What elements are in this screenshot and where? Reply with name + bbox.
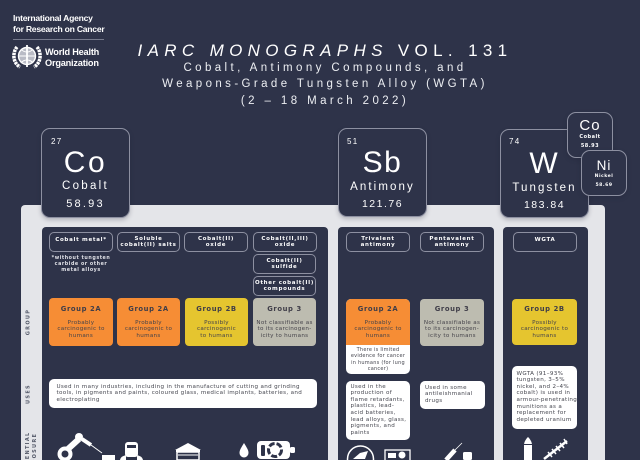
- label: WGTA: WGTA: [535, 237, 555, 243]
- group card: oxide 2B: carcinogenic: [197, 326, 236, 332]
- uses: WGTA: nickel, and 2–4%: [516, 384, 569, 390]
- element card: small cobalt: [567, 112, 613, 158]
- group card: other cobalt 3: icity to humans: [261, 333, 308, 339]
- element card: cobalt: Co: [64, 146, 107, 179]
- label: cobalt sulfide: sulfide: [272, 264, 297, 270]
- limited evidence note: in humans (for lung: [351, 360, 405, 366]
- icon: welder: [120, 442, 143, 460]
- label: trivalent antimony: [346, 232, 410, 252]
- logo: IARC and WHO: [12, 13, 105, 68]
- group card: cobalt metal 2A: humans: [69, 333, 93, 339]
- icon: drop and battery recycling: [240, 441, 295, 459]
- element card: small cobalt: 58.93: [581, 143, 599, 149]
- uses: trivalent antimony: acid batteries,: [350, 410, 396, 416]
- group card: oxide 2B: Group 2B: [196, 305, 237, 313]
- uses: trivalent antimony: production of: [350, 390, 392, 396]
- label: cobalt sulfide: Cobalt(II): [266, 258, 303, 264]
- uses: pentavalent antimony: Used in some: [425, 384, 467, 390]
- group heading: carcinogenic to: [354, 326, 402, 332]
- element card: tungsten: Tungsten: [512, 182, 577, 194]
- element card: tungsten: W: [529, 147, 558, 180]
- label: cobalt metal: [49, 232, 113, 252]
- group card: soluble salts 2A: Group 2A: [128, 305, 169, 313]
- panel: tungsten: [503, 227, 588, 460]
- group heading: [346, 299, 410, 345]
- uses: cobalt: [49, 379, 317, 408]
- group card: pentavalent antimony 3: icity to humans: [428, 333, 476, 339]
- label: cobalt metal: Cobalt metal*: [55, 237, 107, 243]
- group card: soluble salts 2A: Probably: [135, 320, 162, 326]
- icon: chain of bullets: [543, 438, 568, 460]
- panel: cobalt: [42, 227, 328, 460]
- row label: uses: USES: [25, 384, 31, 404]
- group card: other cobalt 3: [253, 298, 316, 346]
- group card: WGTA 2B: carcinogenic to: [521, 326, 568, 332]
- element card: small nickel: Nickel: [595, 174, 613, 179]
- label: cobalt oxide: oxide: [206, 242, 226, 248]
- uses: trivalent antimony: plastics, lead-: [350, 403, 394, 409]
- element card: small nickel: 58.69: [595, 183, 613, 188]
- uses: WGTA: [512, 366, 577, 429]
- limited evidence note: cancer): [368, 366, 388, 372]
- label: trivalent antimony: antimony: [361, 242, 395, 248]
- limited evidence note: There is limited: [357, 347, 399, 353]
- label: soluble salts: cobalt(II) salts: [120, 242, 177, 248]
- label: other cobalt compounds: Other cobalt(II): [255, 280, 314, 286]
- panel: antimony: [338, 227, 494, 460]
- footnote: cobalt metal: *without tungsten: [52, 256, 110, 261]
- subtitle: Weapons-Grade Tungsten Alloy (WGTA): [162, 78, 488, 90]
- limited evidence note: evidence for cancer: [351, 353, 405, 359]
- row label: potential exposure: [25, 432, 38, 460]
- uses: cobalt: Used in many industries, including in the manufacture of cutting and grinding: [56, 384, 300, 390]
- group card: pentavalent antimony 3: [420, 299, 484, 346]
- label: other cobalt compounds: compounds: [264, 286, 305, 292]
- uses: trivalent antimony: pigments, and: [350, 423, 395, 429]
- group card: trivalent antimony 2A with note: [346, 299, 410, 374]
- subtitle: [162, 62, 488, 106]
- footnote: cobalt metal: carbide or other: [55, 262, 107, 267]
- label: pentavalent antimony: Pentavalent: [429, 236, 475, 242]
- uses: trivalent antimony: paints: [350, 430, 370, 436]
- element card: cobalt: 27: [51, 137, 62, 146]
- element card: small cobalt: Cobalt: [579, 134, 601, 140]
- element card: cobalt: 58.93: [66, 198, 105, 210]
- uses: cobalt: electroplating: [56, 397, 100, 403]
- label: WGTA: [513, 232, 577, 252]
- IARC name: [13, 13, 105, 34]
- subtitle: Cobalt, Antimony Compounds, and: [183, 62, 467, 74]
- icon: waste bin: [175, 443, 201, 460]
- WHO name: [45, 47, 99, 68]
- label: soluble salts: [117, 232, 180, 252]
- element card: tungsten: 183.84: [524, 199, 565, 211]
- group card: soluble salts 2A: humans: [136, 333, 161, 339]
- footnote: cobalt metal: metal alloys: [61, 268, 101, 273]
- group card: oxide 2B: [185, 298, 248, 346]
- uses: pentavalent antimony: [420, 381, 485, 409]
- IARC name: International Agency: [13, 13, 93, 23]
- group card: WGTA 2B: Group 2B: [524, 305, 565, 313]
- group card: cobalt metal 2A: [49, 298, 113, 346]
- uses: trivalent antimony: [346, 381, 410, 440]
- element card: tungsten: [500, 129, 589, 218]
- icon: robot arm: [58, 433, 115, 460]
- group card: oxide 2B: Possibly: [204, 320, 229, 326]
- uses: WGTA: replacement for: [516, 410, 566, 416]
- label: cobalt II III oxide: [253, 232, 317, 252]
- element card: antimony: Sb: [363, 146, 402, 179]
- group card: other cobalt 3: Group 3: [267, 305, 302, 313]
- group card: cobalt metal 2A: Probably: [68, 320, 94, 326]
- limited evidence note: [351, 347, 405, 372]
- group card: pentavalent antimony 3: Group 3: [435, 305, 469, 313]
- label: pentavalent antimony: antimony: [435, 242, 469, 248]
- group card: pentavalent antimony 3: to its carcinogen-: [425, 326, 479, 332]
- label: cobalt II III oxide: Cobalt(II,III): [261, 236, 309, 242]
- IARC name: for Research on Cancer: [13, 24, 104, 34]
- icon: munition: [524, 437, 532, 460]
- group heading: Group 2A: [358, 305, 398, 313]
- uses: WGTA: munitions as a: [516, 404, 562, 410]
- label: other cobalt compounds: [253, 276, 316, 296]
- icon: no flame circle: [346, 445, 374, 460]
- element card: small nickel: [581, 150, 627, 196]
- uses: pentavalent antimony: drugs: [425, 398, 443, 404]
- uses: trivalent antimony: flame retardants,: [350, 397, 405, 403]
- icon: WHO emblem: [12, 45, 42, 68]
- element card: antimony: [338, 128, 427, 217]
- uses: WGTA: depleted uranium: [516, 417, 572, 423]
- element card: antimony: 51: [347, 137, 358, 146]
- group card: WGTA 2B: humans: [532, 333, 557, 339]
- group card: pentavalent antimony 3: Not classifiable as: [424, 320, 480, 326]
- group card: soluble salts 2A: carcinogenic to: [125, 326, 172, 332]
- label: cobalt oxide: [184, 232, 248, 252]
- uses: cobalt: tools, in pigments and paints, coloured glass, medical implants, batteries, and: [56, 390, 302, 396]
- element card: antimony: Antimony: [350, 181, 415, 193]
- group heading: humans: [366, 333, 390, 339]
- label: pentavalent antimony: [420, 232, 484, 252]
- group card: WGTA 2B: [512, 299, 577, 345]
- element card: cobalt: [41, 128, 130, 218]
- subtitle: (2 – 18 March 2022): [241, 94, 409, 106]
- main light panel: [21, 205, 605, 460]
- group heading: Probably: [365, 320, 391, 326]
- element card: small cobalt: Co: [579, 117, 601, 134]
- uses: WGTA: WGTA (91–93%: [516, 371, 563, 377]
- group card: other cobalt 3: to its carcinogen-: [257, 326, 312, 332]
- group card: oxide 2B: to humans: [200, 333, 233, 339]
- group card: WGTA 2B: Possibly: [532, 320, 557, 326]
- icon: pigment tray: [384, 449, 411, 460]
- element card: small nickel: Ni: [597, 158, 611, 173]
- element card: antimony: 121.76: [362, 198, 403, 210]
- uses: trivalent antimony: lead alloys, glass,: [350, 417, 406, 423]
- group card: cobalt metal 2A: Group 2A: [61, 305, 101, 313]
- uses: trivalent antimony: Used in the: [350, 384, 386, 390]
- label: cobalt oxide: Cobalt(II): [198, 236, 234, 242]
- group card: other cobalt 3: Not classifiable as: [256, 320, 313, 326]
- label: cobalt sulfide: [253, 254, 316, 274]
- group card: cobalt metal 2A: carcinogenic to: [57, 326, 105, 332]
- group card: soluble salts 2A: [117, 298, 180, 346]
- uses: WGTA: tungsten, 3–5%: [516, 377, 565, 383]
- element card: cobalt: Cobalt: [62, 180, 109, 192]
- label: cobalt II III oxide: oxide: [275, 242, 295, 248]
- label: trivalent antimony: Trivalent: [361, 236, 395, 242]
- uses: WGTA: armour-penetrating: [516, 397, 577, 403]
- WHO name: World Health: [45, 47, 99, 57]
- row label: group: GROUP: [25, 309, 31, 335]
- uses: pentavalent antimony: antileishmanial: [425, 391, 473, 397]
- WHO name: Organization: [45, 58, 99, 68]
- label: soluble salts: Soluble: [134, 236, 162, 242]
- footnote: cobalt metal: [52, 255, 110, 273]
- uses: WGTA: cobalt) is used in: [516, 390, 570, 396]
- title: IARC MONOGRAPHS VOL. 131: [138, 41, 512, 60]
- icon: syringe and vial: [444, 442, 472, 460]
- element card: tungsten: 74: [509, 137, 520, 146]
